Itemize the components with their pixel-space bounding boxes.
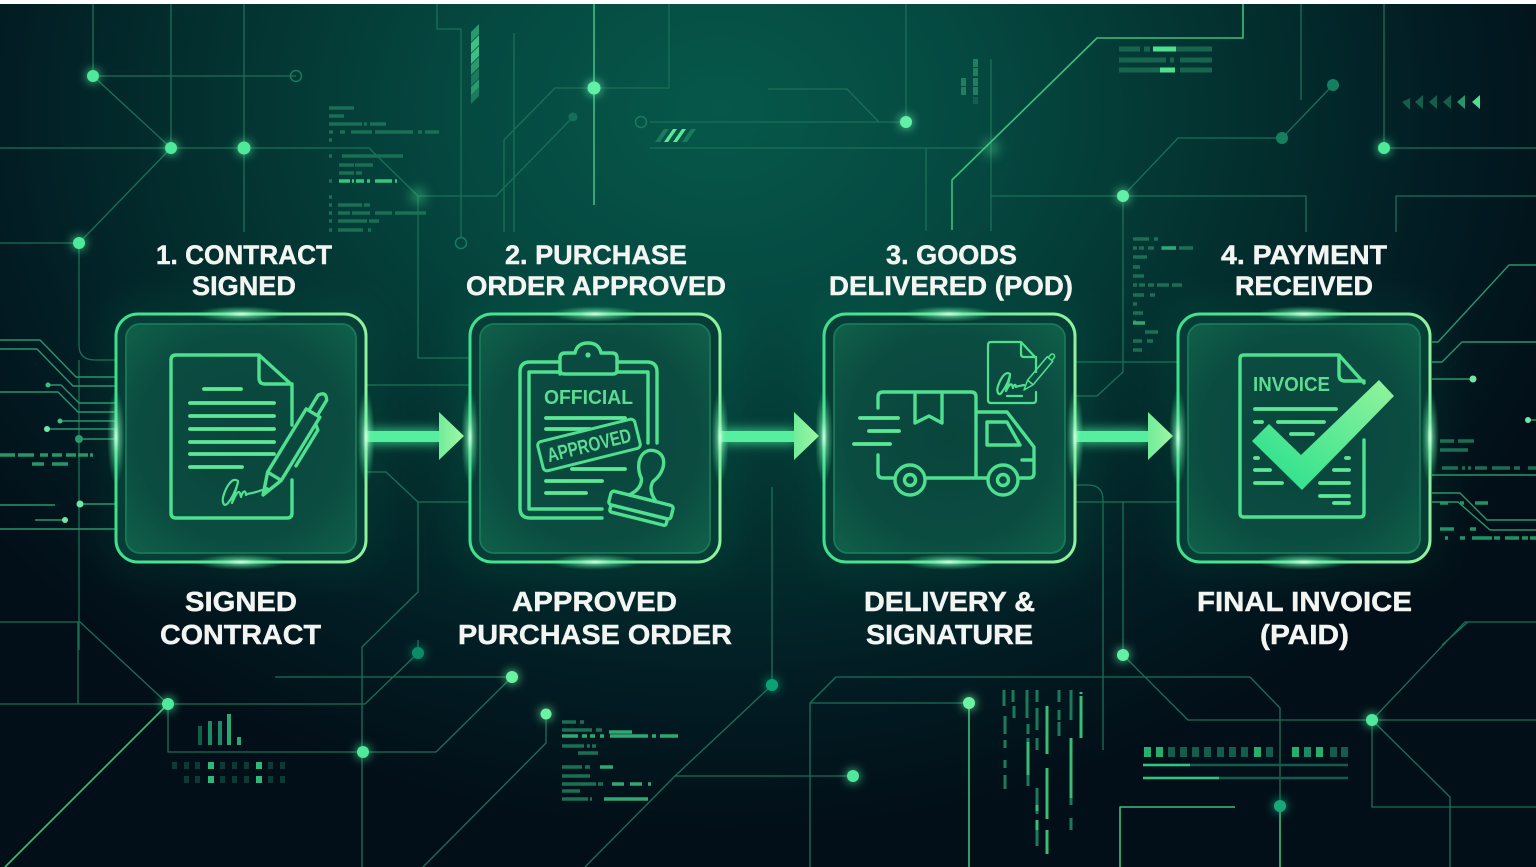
- small nodes and rings: [44, 70, 1531, 523]
- heading: step 4: RECEIVED: [1235, 271, 1373, 301]
- heading: step 4: 4. PAYMENT: [1221, 240, 1388, 270]
- card frame: [116, 314, 366, 562]
- card frame: [1178, 314, 1430, 562]
- card inner panel: [1188, 324, 1420, 553]
- icon: clipboard with approved stamp: APPROVED: [545, 425, 634, 467]
- edge highlights: [107, 306, 375, 570]
- card inner panel: [834, 324, 1065, 553]
- icon: signed document with pen: [171, 355, 336, 518]
- caption: delivery and signature: SIGNATURE: [866, 619, 1033, 650]
- card frame: [470, 314, 720, 562]
- arrow 3: [1076, 412, 1173, 460]
- arrow 2: [721, 412, 819, 460]
- heading: step 1: 1. CONTRACT: [156, 240, 332, 270]
- caption: delivery and signature: DELIVERY &: [864, 586, 1035, 617]
- icon: clipboard with approved stamp: [520, 343, 686, 526]
- edge highlights: [815, 306, 1084, 570]
- heading: step 2: ORDER APPROVED: [466, 271, 726, 301]
- soft junction glows: [411, 141, 998, 203]
- heading: step 2: 2. PURCHASE: [505, 240, 687, 270]
- edge highlights: [1169, 306, 1439, 570]
- panel: step 4 card: [1169, 306, 1439, 570]
- caption: approved purchase order: PURCHASE ORDER: [458, 619, 732, 650]
- panel: step 1 card: [107, 306, 375, 570]
- icon: clipboard with approved stamp: OFFICIAL: [544, 387, 633, 409]
- caption: final invoice paid: FINAL INVOICE: [1197, 586, 1412, 617]
- caption: approved purchase order: APPROVED: [512, 586, 677, 617]
- code texture blocks: [0, 108, 1536, 799]
- caption: signed contract: CONTRACT: [160, 619, 321, 650]
- panel: step 2 card: [461, 306, 729, 570]
- card inner panel: [126, 324, 356, 553]
- card inner panel: [480, 324, 710, 553]
- card frame: [824, 314, 1075, 562]
- caption: final invoice paid: (PAID): [1260, 619, 1349, 650]
- caption: signed contract: SIGNED: [185, 586, 297, 617]
- icon: delivery truck: [854, 392, 1034, 495]
- panel: step 3 card: [815, 306, 1084, 570]
- edge highlights: [461, 306, 729, 570]
- icon: signed proof of delivery: [988, 342, 1057, 403]
- broad glow behind cards: [116, 314, 1430, 562]
- heading: step 3: DELIVERED (POD): [829, 271, 1073, 301]
- heading: step 3: 3. GOODS: [886, 240, 1017, 270]
- heading: step 1: SIGNED: [192, 271, 296, 301]
- arrow 1: [366, 412, 464, 460]
- icon: paid invoice with check mark: INVOICE: [1253, 374, 1330, 396]
- glowing nodes: [73, 70, 1390, 812]
- icon: paid invoice with check mark: [1240, 355, 1394, 517]
